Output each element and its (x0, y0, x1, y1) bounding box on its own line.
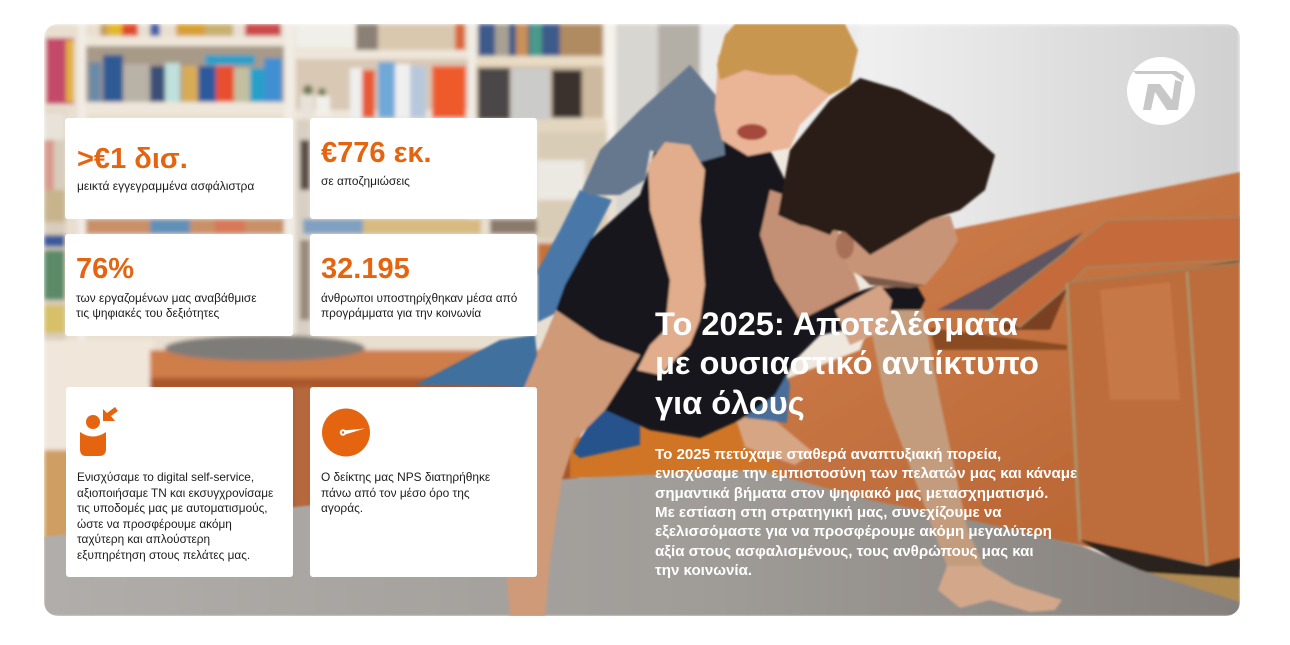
card: NPS score (310, 387, 537, 577)
stat caption: μεικτά εγγεγραμμένα ασφάλιστρα (77, 179, 254, 193)
card text: αξιοποιήσαμε ΤΝ και εκσυγχρονίσαμε (77, 486, 273, 500)
stat card: people supported (310, 234, 537, 336)
stat value: >€1 δισ. (77, 143, 188, 175)
father arms (505, 310, 1062, 616)
boy legs in jeans (415, 190, 813, 465)
stat caption: προγράμματα για την κοινωνία (321, 306, 481, 320)
body text: σημαντικά βήματα στον ψηφιακό μας μετασχηματισμό. (655, 485, 1048, 502)
card text: πάνω από τον μέσο όρο της (321, 486, 470, 500)
stat caption: τις ψηφιακές του δεξιότητες (76, 306, 219, 320)
stat value: €776 εκ. (321, 137, 432, 169)
left sofa and floor (44, 338, 152, 351)
main row books (89, 62, 101, 114)
top row books (100, 24, 108, 38)
father neck and face (760, 190, 958, 345)
lower shelves (44, 140, 66, 340)
title: για όλους (655, 384, 805, 421)
card text: Ο δείκτης μας NPS διατηρήθηκε (321, 470, 490, 484)
stat caption: άνθρωποι υποστηρίχθηκαν μέσα από (321, 291, 517, 305)
body text (655, 446, 1077, 579)
stat value: 32.195 (321, 253, 410, 285)
body text: Το 2025 πετύχαμε σταθερά αναπτυξιακή πορεία, (655, 446, 1001, 463)
icon: gauge (322, 408, 370, 456)
body text: εξελισσόμαστε για να προσφέρουμε ακόμη μεγαλύτερη (655, 523, 1052, 540)
card text: εξυπηρέτηση στους πελάτες μας. (77, 548, 250, 562)
stat value: 76% (76, 253, 134, 285)
body text: την κοινωνία. (655, 562, 752, 579)
title (655, 305, 1039, 421)
father and son (415, 24, 1062, 616)
stat caption: σε αποζημιώσεις (321, 174, 410, 188)
icon: person with incoming arrow (80, 407, 118, 456)
carpet and floor (44, 470, 1240, 616)
boy arm and hand (637, 142, 705, 375)
stat card: gross written premiums (65, 118, 293, 219)
card text: ώστε να προσφέρουμε ακόμη (77, 517, 232, 531)
card text: Ενισχύσαμε το digital self-service, (77, 470, 254, 484)
card text (321, 470, 490, 515)
title: με ουσιαστικό αντίκτυπο (655, 344, 1039, 381)
card text (77, 470, 273, 562)
right leather sofa (570, 172, 1240, 570)
stat caption: των εργαζομένων μας αναβάθμισε (76, 291, 257, 305)
body text: αξία στους ασφαλισμένους, τους ανθρώπους μας και (655, 543, 1034, 560)
boy shirt (582, 65, 725, 195)
stat card: claims paid (310, 118, 537, 219)
boy face (715, 55, 830, 156)
body text: ενισχύσαμε την εμπιστοσύνη των πελατών μας και κάναμε (655, 465, 1077, 482)
stat card: employees upskilled (65, 234, 293, 336)
card text: τις υποδομές μας με αυτοματισμούς, (77, 501, 268, 515)
title: Το 2025: Αποτελέσματα (655, 305, 1018, 342)
logo: white circle with N mark (1127, 57, 1195, 125)
stat caption (321, 291, 517, 320)
wall and bookcase background (44, 24, 1240, 556)
stat caption (76, 291, 257, 320)
card text: αγοράς. (321, 501, 363, 515)
body text: Με εστίαση στη στρατηγική μας, συνεχίζουμε να (655, 504, 1002, 521)
father shirt (556, 130, 925, 438)
father hair (778, 78, 995, 255)
card: digital self-service (66, 387, 293, 577)
card text: ταχύτερη και απλούστερη (77, 532, 210, 546)
boy hair (717, 24, 858, 95)
